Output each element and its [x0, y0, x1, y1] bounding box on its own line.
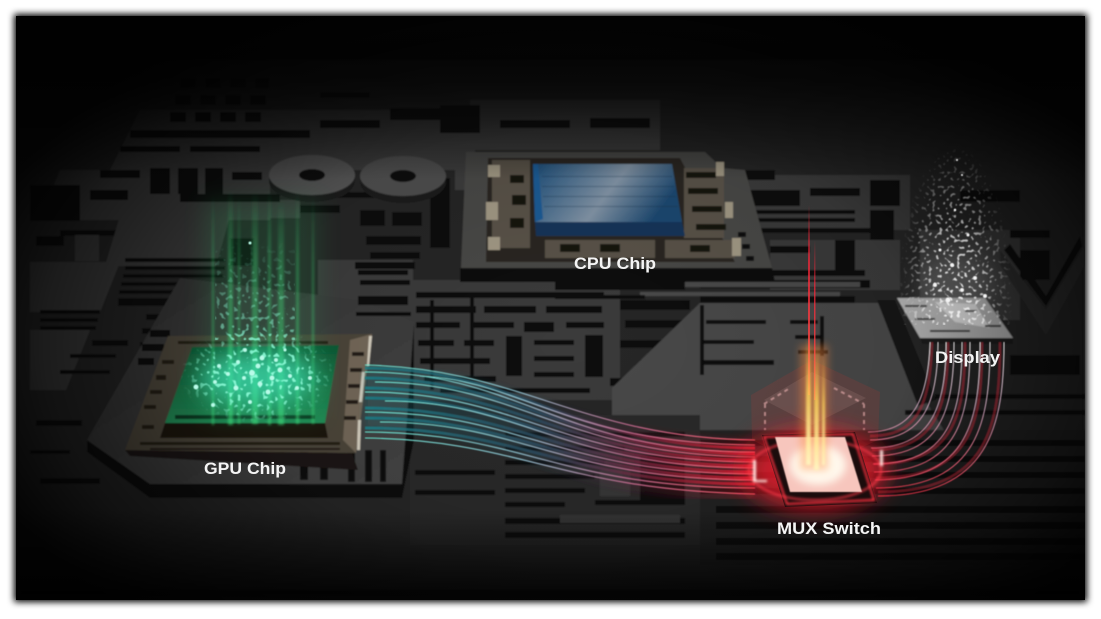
left circuit blocks: [30, 178, 450, 484]
label: GPU Chip: GPU Chip: [204, 459, 286, 478]
CPU chip: [533, 164, 685, 236]
label: MUX Switch: MUX Switch: [777, 519, 881, 538]
GPU chip assembly: [125, 334, 372, 470]
central circuit grid: [362, 280, 690, 400]
MUX vertical light beams: [800, 205, 828, 470]
MUX translucent cube: [751, 360, 880, 448]
bottom right ribbed stripes: [700, 355, 1086, 565]
GPU particle cloud: [182, 240, 332, 422]
label: Display: Display: [935, 348, 1001, 367]
top-left circuit blocks: [46, 107, 660, 236]
GPU to MUX data stream: [365, 365, 755, 494]
CPU plate: [460, 152, 775, 282]
bottom centre traces: [410, 415, 700, 545]
plate under the display stream: [612, 303, 950, 440]
display particle cloud: [900, 150, 1010, 325]
display chip: [897, 298, 1013, 344]
label: CPU Chip: CPU Chip: [574, 254, 656, 273]
right circuit blocks: [555, 170, 1085, 335]
GPU plate: [87, 270, 414, 498]
MUX to display data stream: [868, 342, 1004, 496]
plate details: [700, 300, 936, 406]
MUX chip and glow: [743, 430, 887, 510]
GPU green light beams: [205, 190, 320, 425]
inductor coils: [269, 155, 446, 203]
